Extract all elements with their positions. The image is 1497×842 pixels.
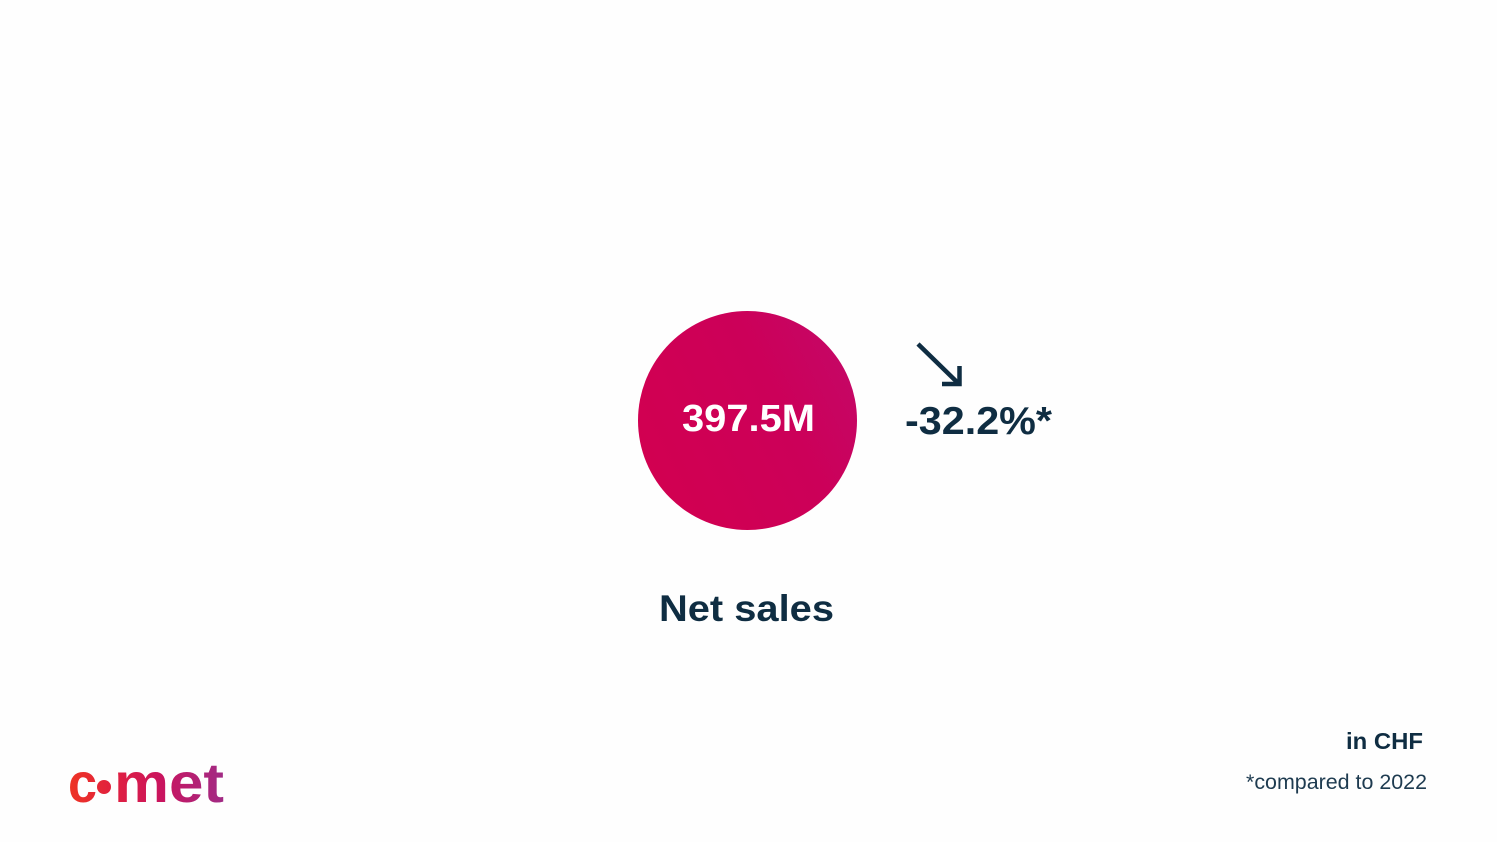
net sales value: 397.5M bbox=[682, 398, 815, 440]
change percentage: -32.2%* bbox=[905, 400, 1053, 443]
heading: net sales: Net sales bbox=[659, 588, 834, 629]
icon: down arrow bbox=[918, 344, 960, 384]
logo: comet bbox=[68, 751, 224, 814]
logo: comet: met bbox=[114, 751, 224, 814]
unit note: in CHF bbox=[1346, 728, 1423, 754]
comparison footnote: *compared to 2022 bbox=[1246, 771, 1427, 794]
net sales circle bbox=[638, 311, 857, 530]
logo: comet: c bbox=[68, 751, 97, 814]
